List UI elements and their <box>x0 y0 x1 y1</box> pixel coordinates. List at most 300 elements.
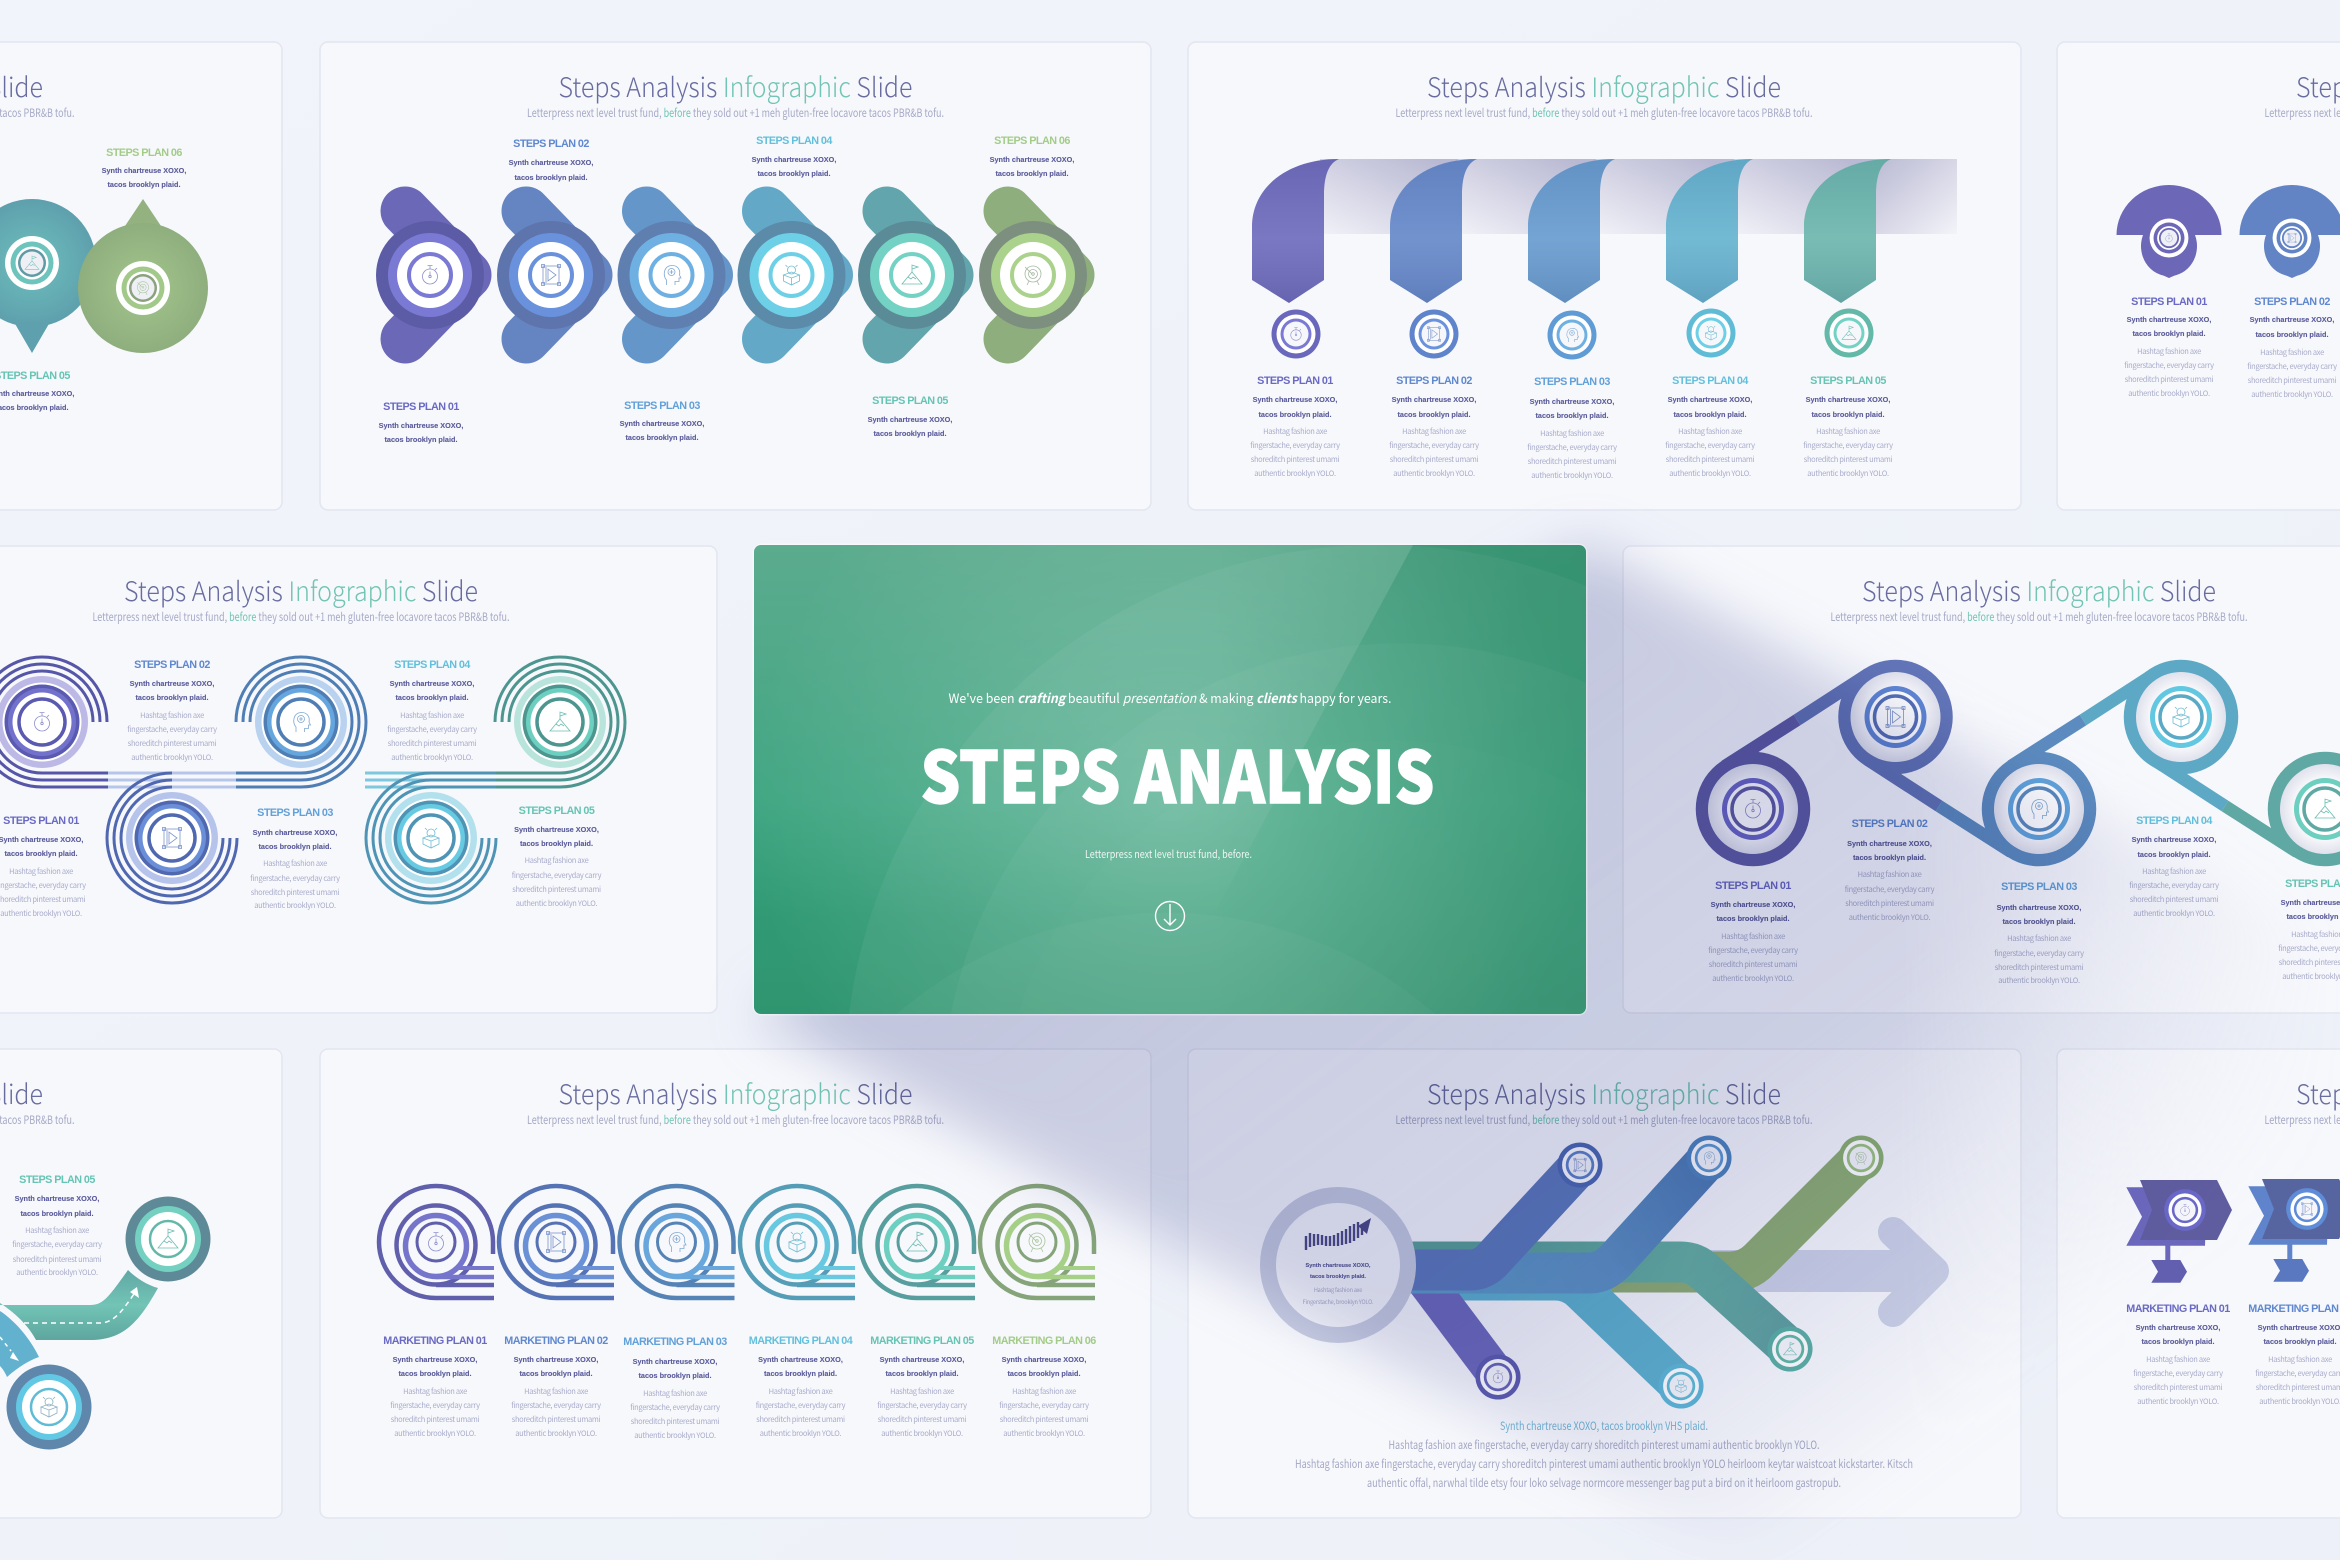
sub heading: Letterpress next level trust fund, before they sold out +1 meh gluten-free locavore tacos PBR&B tofu. <box>92 609 510 625</box>
text: steps plan 05: STEPS PLAN 05 <box>872 395 948 407</box>
text: steps plan 01: authentic brooklyn YOLO. <box>2128 388 2210 399</box>
text: marketing plan 05 <box>870 1335 974 1439</box>
text: steps plan 04 <box>752 135 836 178</box>
panel: flag steps, bottom right <box>2057 1049 2340 1518</box>
heading: Steps Analysis Infographic Slide <box>1862 570 2216 609</box>
text: steps plan 05 <box>1803 375 1893 479</box>
chain belt <box>1702 666 2340 860</box>
branch 3 blue <box>1400 1158 1709 1273</box>
sub heading: Letterpress next level trust fund, before they sold out +1 meh gluten-free locavore tacos PBR&B tofu. <box>1830 609 2248 625</box>
text: steps plan 04: fingerstache, everyday carry <box>1665 440 1755 451</box>
spiral centre 5 <box>514 676 606 768</box>
text: steps plan 06: STEPS PLAN 06 <box>994 135 1070 147</box>
arrow: pale background arrow <box>1700 1232 1934 1312</box>
text: steps plan 04: authentic brooklyn YOLO. <box>391 752 473 763</box>
text: steps plan 05: fingerstache, everyday carry <box>12 1239 102 1250</box>
text: marketing plan 02: tacos brooklyn plaid. <box>520 1369 592 1378</box>
heading: Steps Analysis Infographic Slide <box>1427 1073 1781 1112</box>
spiral centre 4 <box>385 792 477 884</box>
caption text: Hashtag fashion axe fingerstache, everyday carry shoreditch pinterest umami authentic brooklyn YOLO heirloom keytar waistcoat kickstarter. Kitsch <box>1295 1456 1913 1472</box>
text: steps plan 04: tacos brooklyn plaid. <box>1674 410 1746 419</box>
panel card <box>320 42 1151 510</box>
text: steps plan 02: shoreditch pinterest umami <box>128 738 216 749</box>
text: marketing plan 01: Synth chartreuse XOXO, <box>2136 1323 2220 1332</box>
end node 4 <box>1658 1363 1704 1409</box>
text: marketing plan 01: Synth chartreuse XOXO, <box>393 1355 477 1364</box>
text: steps plan 04 <box>1665 375 1755 479</box>
text: steps plan 02 <box>127 659 217 763</box>
text: marketing plan 05: fingerstache, everyday carry <box>877 1400 967 1411</box>
text: steps plan 05: tacos brooklyn plaid. <box>520 839 593 848</box>
fan 1 <box>2116 185 2222 278</box>
text: steps plan 04: STEPS PLAN 04 <box>394 659 470 671</box>
long drop shadow of cover slide <box>756 532 2201 1509</box>
text: steps plan 02: shoreditch pinterest umami <box>1845 898 1934 909</box>
text: marketing plan 01: MARKETING PLAN 01 <box>2126 1303 2230 1315</box>
text: marketing plan 01 <box>2126 1303 2230 1407</box>
hub text: Fingerstache, brooklyn YOLO. <box>1303 1298 1374 1306</box>
text: marketing plan 06: shoreditch pinterest umami <box>1000 1414 1088 1425</box>
text: marketing plan 01: shoreditch pinterest umami <box>391 1414 479 1425</box>
text: steps plan 02: Synth chartreuse XOXO, <box>509 158 593 167</box>
text: marketing plan 01: tacos brooklyn plaid. <box>2142 1337 2214 1346</box>
panel card <box>0 546 717 1013</box>
text: steps plan 03: STEPS PLAN 03 <box>1534 376 1610 388</box>
branch 4 cyan <box>1440 1280 1681 1386</box>
text: steps plan 01: Synth chartreuse XOXO, <box>1253 395 1337 404</box>
chevron 1 <box>376 211 484 339</box>
text: steps plan 01: tacos brooklyn plaid. <box>5 849 77 858</box>
text: steps plan 05: STEPS PLAN 05 <box>519 805 595 817</box>
text: steps plan 03: authentic brooklyn YOLO. <box>1531 470 1613 481</box>
text: steps plan 02 <box>2247 296 2337 400</box>
spiral 4 lines <box>366 773 496 903</box>
ribbon 3 <box>1528 159 1615 303</box>
text: marketing plan 04: Hashtag fashion axe <box>769 1386 833 1397</box>
text: steps plan 05: shoreditch pinterest umami <box>1804 454 1892 465</box>
text: steps plan 02: STEPS PLAN 02 <box>513 138 589 150</box>
ribbon 1 <box>1252 159 1339 303</box>
flag 1 <box>2126 1180 2232 1283</box>
text: steps plan 05: tacos brooklyn plaid. <box>874 429 946 438</box>
chevron 4 <box>738 211 846 339</box>
text: steps plan 02: STEPS PLAN 02 <box>2254 296 2330 308</box>
text: marketing plan 01: Hashtag fashion axe <box>403 1386 467 1397</box>
text: marketing plan 06: authentic brooklyn YOLO. <box>1003 1428 1085 1439</box>
ribbon 4 <box>1666 159 1753 303</box>
icon: download arrow <box>1156 902 1184 930</box>
text: marketing plan 03 <box>623 1336 727 1441</box>
text: steps plan 01: Hashtag fashion axe <box>1721 931 1785 942</box>
text: steps plan 01: shoreditch pinterest umami <box>1251 454 1339 465</box>
text: marketing plan 02: Hashtag fashion axe <box>524 1386 588 1397</box>
hub arrow head <box>1358 1218 1371 1234</box>
branch 5 teal <box>1412 1262 1790 1349</box>
text: steps plan 05: Synth chartreuse XOXO, <box>868 415 952 424</box>
text: steps plan 01 <box>1708 880 1798 984</box>
text: marketing plan 05: tacos brooklyn plaid. <box>886 1369 958 1378</box>
text: marketing plan 05: authentic brooklyn YOLO. <box>881 1428 963 1439</box>
cover slide <box>752 544 1588 1016</box>
text: steps plan 06: tacos brooklyn plaid. <box>996 169 1068 178</box>
fan 2 <box>2240 185 2340 278</box>
text: steps plan 01: Hashtag fashion axe <box>2137 346 2201 357</box>
chevron 6 <box>979 211 1087 339</box>
panel card <box>2057 1049 2340 1518</box>
text: steps plan 05: authentic brooklyn YOLO. <box>16 1267 98 1278</box>
panel card <box>1188 1049 2021 1518</box>
spiral 2 <box>499 1186 614 1298</box>
text: steps plan 04: Hashtag fashion axe <box>400 710 464 721</box>
text: steps plan 01: STEPS PLAN 01 <box>1715 880 1791 892</box>
text: steps plan 01: Synth chartreuse XOXO, <box>379 421 463 430</box>
text: steps plan 05 <box>868 395 952 438</box>
text: marketing plan 01: authentic brooklyn YOLO. <box>2137 1396 2219 1407</box>
text: marketing plan 02: Synth chartreuse XOXO, <box>514 1355 598 1364</box>
spiral 6 <box>980 1186 1095 1298</box>
spiral 3 lines <box>236 657 366 787</box>
text: steps plan 03: authentic brooklyn YOLO. <box>1998 975 2080 986</box>
spiral 3 <box>620 1186 734 1298</box>
text: steps plan 03: Synth chartreuse XOXO, <box>620 419 704 428</box>
spiral 2 lines <box>107 773 237 903</box>
text: steps plan 04 <box>2129 815 2219 919</box>
sub heading: Letterpress next level trust fund, before they sold out +1 meh gluten-free locavore tacos PBR&B tofu. <box>527 105 944 121</box>
text: steps plan 02: authentic brooklyn YOLO. <box>1849 912 1930 923</box>
text: steps plan 02: STEPS PLAN 02 <box>134 659 210 671</box>
panel card <box>1188 42 2021 510</box>
panel: fan steps, top right <box>2057 42 2340 510</box>
text: steps plan 02 <box>1845 818 1935 923</box>
text: marketing plan 01: fingerstache, everyday carry <box>2133 1368 2223 1379</box>
text: marketing plan 04: shoreditch pinterest umami <box>756 1414 845 1425</box>
text: steps plan 02: STEPS PLAN 02 <box>1396 375 1472 387</box>
text: marketing plan 06 <box>992 1335 1096 1439</box>
text: marketing plan 02: Hashtag fashion axe <box>2268 1354 2332 1365</box>
text: steps plan 01: STEPS PLAN 01 <box>3 815 79 827</box>
text: marketing plan 01: tacos brooklyn plaid. <box>399 1369 471 1378</box>
text: marketing plan 05: shoreditch pinterest umami <box>878 1414 966 1425</box>
text: steps plan 05: Synth chartreuse XOXO, <box>1806 395 1890 404</box>
text: marketing plan 05: MARKETING PLAN 05 <box>870 1335 974 1347</box>
text: marketing plan 04 <box>749 1335 853 1439</box>
heading: Steps Analysis Infographic Slide <box>1427 66 1781 105</box>
text: marketing plan 02: tacos brooklyn plaid. <box>2264 1337 2336 1346</box>
text: steps plan 05 <box>2278 878 2340 982</box>
text: steps plan 01 <box>1250 375 1340 479</box>
text: steps plan 03: shoreditch pinterest umami <box>1995 962 2083 973</box>
text: steps plan 04: shoreditch pinterest umami <box>388 738 476 749</box>
text: steps plan 02: tacos brooklyn plaid. <box>515 173 587 182</box>
panel card <box>0 42 282 510</box>
text: steps plan 03: tacos brooklyn plaid. <box>2003 917 2075 926</box>
flag 2 <box>2248 1179 2340 1282</box>
text: steps plan 01: STEPS PLAN 01 <box>2131 296 2207 308</box>
text: steps plan 01 <box>2124 296 2214 399</box>
heading: Steps Analysis Infographic Slide <box>124 570 478 609</box>
chain node 1 <box>1708 764 1798 854</box>
text: steps plan 03: authentic brooklyn YOLO. <box>254 900 336 911</box>
text: marketing plan 01: Hashtag fashion axe <box>2146 1354 2210 1365</box>
text: steps plan 04: STEPS PLAN 04 <box>1672 375 1748 387</box>
ribbon 2 <box>1390 159 1477 303</box>
panel: chevron steps <box>320 42 1151 510</box>
text: steps plan 02: tacos brooklyn plaid. <box>1853 853 1926 862</box>
text: steps plan 04: shoreditch pinterest umami <box>1666 454 1754 465</box>
text: steps plan 04: tacos brooklyn plaid. <box>2138 850 2210 859</box>
text: marketing plan 03: Synth chartreuse XOXO, <box>633 1357 717 1366</box>
text: steps plan 04: STEPS PLAN 04 <box>756 135 832 147</box>
text: marketing plan 06: Hashtag fashion axe <box>1012 1386 1076 1397</box>
text: marketing plan 02 <box>504 1335 608 1439</box>
text: marketing plan 05: Hashtag fashion axe <box>890 1386 954 1397</box>
target 5 <box>1824 308 1874 358</box>
panel: fishbone <box>1188 1049 2021 1518</box>
text: steps plan 04: Synth chartreuse XOXO, <box>752 155 836 164</box>
heading: Steps Analysis Infographic Slide <box>558 1073 912 1112</box>
text: steps plan 01: shoreditch pinterest umami <box>2125 374 2213 385</box>
text: steps plan 03 <box>620 400 704 442</box>
text: marketing plan 02: fingerstache, everyday carry <box>511 1400 601 1411</box>
panel card <box>1623 546 2340 1013</box>
text: steps plan 01: Synth chartreuse XOXO, <box>0 835 83 844</box>
text: marketing plan 01: shoreditch pinterest umami <box>2134 1382 2222 1393</box>
text: steps plan 01: Synth chartreuse XOXO, <box>1711 900 1795 909</box>
text: steps plan 03: fingerstache, everyday carry <box>250 873 340 884</box>
text: steps plan 05: tacos brooklyn plaid. <box>21 1209 93 1218</box>
text: steps plan 02: Hashtag fashion axe <box>140 710 204 721</box>
text: steps plan 01 <box>0 815 86 919</box>
text: steps plan 01: STEPS PLAN 01 <box>1257 375 1333 387</box>
text: steps plan 06: STEPS PLAN 06 <box>106 147 182 159</box>
text: steps plan 03: Hashtag fashion axe <box>2007 933 2071 944</box>
text: steps plan 05: authentic brooklyn YOLO. <box>1807 468 1889 479</box>
caption text: authentic offal, narwhal tilde etsy four loko selvage normcore messenger bag put a bird on it heirloom gastropub. <box>1367 1475 1841 1491</box>
branch 1 purple <box>1416 1268 1498 1377</box>
chevron 5 <box>858 211 966 339</box>
text: steps plan 02: Hashtag fashion axe <box>1402 426 1466 437</box>
text: steps plan 05: Synth chartreuse XOXO, <box>514 825 599 834</box>
hub text <box>1303 1263 1374 1306</box>
card glow edge <box>752 544 1588 1016</box>
chevron 2 <box>497 211 605 339</box>
text: steps plan 02: Synth chartreuse XOXO, <box>1392 395 1476 404</box>
sub heading: Letterpress next level trust fund, before they sold out +1 meh gluten-free locavore tacos PBR&B tofu. <box>1396 1112 1812 1128</box>
text: steps plan 04: authentic brooklyn YOLO. <box>1669 468 1751 479</box>
panel: chain steps, middle right <box>1623 546 2340 1013</box>
node cyan <box>6 1364 92 1450</box>
text: marketing plan 03: shoreditch pinterest umami <box>631 1416 719 1427</box>
text: steps plan 05: shoreditch pinterest umami <box>13 1254 101 1265</box>
text: marketing plan 02: authentic brooklyn YOLO. <box>2259 1396 2340 1407</box>
text: steps plan 04: Hashtag fashion axe <box>1678 426 1742 437</box>
text: steps plan 02: STEPS PLAN 02 <box>1852 818 1928 830</box>
text: steps plan 02: Synth chartreuse XOXO, <box>2250 315 2334 324</box>
text: steps plan 02: tacos brooklyn plaid. <box>136 693 208 702</box>
text: steps plan 05: tacos brooklyn plaid. <box>1812 410 1884 419</box>
text: steps plan 04: shoreditch pinterest umami <box>2130 894 2218 905</box>
text: steps plan 03: tacos brooklyn plaid. <box>626 433 698 442</box>
text: steps plan 05: Synth chartreuse XOXO, <box>15 1194 99 1203</box>
green bubble step 6 <box>78 199 208 353</box>
text: steps plan 02: Synth chartreuse XOXO, <box>130 679 214 688</box>
node teal <box>126 1196 210 1282</box>
text: steps plan 06: tacos brooklyn plaid. <box>108 180 180 189</box>
text: steps plan 05: fingerstache, everyday carry <box>512 870 602 881</box>
text: steps plan 02 <box>1389 375 1479 479</box>
panel card <box>2057 42 2340 510</box>
caption text: Hashtag fashion axe fingerstache, everyday carry shoreditch pinterest umami authentic brooklyn YOLO. <box>1388 1437 1820 1453</box>
cover subtitle: Letterpress next level trust fund, before. <box>1085 847 1252 862</box>
caption text <box>1295 1418 1913 1491</box>
panel card <box>0 1049 282 1518</box>
text: marketing plan 03: MARKETING PLAN 03 <box>623 1336 727 1348</box>
text: steps plan 01: Synth chartreuse XOXO, <box>2127 315 2211 324</box>
text: steps plan 05: authentic brooklyn YOLO. <box>516 898 597 909</box>
panel: concentric spirals, middle left <box>0 546 717 1013</box>
ribbon 5 <box>1804 159 1891 303</box>
text: steps plan 04: tacos brooklyn plaid. <box>758 169 830 178</box>
text: marketing plan 04: fingerstache, everyday carry <box>756 1400 846 1411</box>
text: steps plan 03: tacos brooklyn plaid. <box>259 842 331 851</box>
text: steps plan 05: fingerstache, everyday carry <box>1803 440 1893 451</box>
text: marketing plan 06: fingerstache, everyday carry <box>999 1400 1089 1411</box>
teal bubble step 5 <box>0 199 96 353</box>
text: steps plan 01 <box>379 401 463 444</box>
text: steps plan 02: fingerstache, everyday carry <box>1845 884 1935 895</box>
text: steps plan 03: tacos brooklyn plaid. <box>1536 411 1608 420</box>
panel: road steps, bottom left <box>0 1049 282 1518</box>
text: marketing plan 05: Synth chartreuse XOXO, <box>880 1355 964 1364</box>
text: steps plan 04: tacos brooklyn plaid. <box>396 693 468 702</box>
text: steps plan 01: tacos brooklyn plaid. <box>1717 914 1789 923</box>
text: marketing plan 03: Hashtag fashion axe <box>643 1388 707 1399</box>
text: marketing plan 06: Synth chartreuse XOXO, <box>1002 1355 1086 1364</box>
spiral 1 <box>379 1186 494 1298</box>
text: steps plan 03: shoreditch pinterest umami <box>251 887 339 898</box>
text: steps plan 04: Synth chartreuse XOXO, <box>2132 835 2216 844</box>
spiral centre 2 <box>126 792 218 884</box>
sub heading: Letterpress next level trust fund, before they sold out +1 meh gluten-free locavore tacos PBR&B tofu. <box>527 1112 944 1128</box>
text: steps plan 02: authentic brooklyn YOLO. <box>1393 468 1475 479</box>
text: steps plan 02: fingerstache, everyday carry <box>2247 361 2337 372</box>
text: marketing plan 02 <box>2248 1303 2340 1407</box>
hub circle <box>1268 1195 1408 1335</box>
text: steps plan 04 <box>387 659 477 763</box>
text: steps plan 03 <box>1527 376 1617 481</box>
text: steps plan 01: fingerstache, everyday carry <box>1708 945 1798 956</box>
text: steps plan 01: authentic brooklyn YOLO. <box>1712 973 1794 984</box>
text: marketing plan 06: tacos brooklyn plaid. <box>1008 1369 1080 1378</box>
text: marketing plan 04: tacos brooklyn plaid. <box>764 1369 837 1378</box>
hub text: Hashtag fashion axe <box>1314 1286 1362 1294</box>
text: steps plan 06 <box>102 147 186 189</box>
text: steps plan 04: Synth chartreuse XOXO, <box>1668 395 1752 404</box>
text: steps plan 01: fingerstache, everyday carry <box>2124 360 2214 371</box>
target 4 <box>1686 308 1736 358</box>
text: steps plan 04: fingerstache, everyday carry <box>2129 880 2219 891</box>
text: steps plan 06 <box>990 135 1074 178</box>
target 2 <box>1410 310 1458 358</box>
end node 3 <box>1686 1135 1732 1181</box>
end node 2 <box>1557 1142 1603 1188</box>
text: steps plan 04: Hashtag fashion axe <box>2142 866 2206 877</box>
text: steps plan 05: Hashtag fashion axe <box>525 855 589 866</box>
spiral centre 3 <box>255 676 347 768</box>
card background <box>754 545 1586 1014</box>
text: steps plan 02: authentic brooklyn YOLO. <box>2251 389 2333 400</box>
text: steps plan 01: tacos brooklyn plaid. <box>1259 410 1331 419</box>
text: steps plan 02: shoreditch pinterest umami <box>1390 454 1478 465</box>
text: steps plan 05 <box>512 805 602 909</box>
text: steps plan 02: fingerstache, everyday carry <box>127 724 217 735</box>
chain node 3 <box>1994 764 2084 854</box>
tagline: We've been crafting beautiful presentation & making clients happy for years. <box>948 688 1392 707</box>
text: steps plan 02: Synth chartreuse XOXO, <box>1847 839 1932 848</box>
icon: rising bar chart <box>1306 1222 1362 1250</box>
text: marketing plan 04: authentic brooklyn YOLO. <box>760 1428 841 1439</box>
text: marketing plan 01: MARKETING PLAN 01 <box>383 1335 487 1347</box>
spiral 5 <box>860 1186 975 1298</box>
text: steps plan 04: Synth chartreuse XOXO, <box>390 679 474 688</box>
text: marketing plan 03: tacos brooklyn plaid. <box>639 1371 711 1380</box>
text: marketing plan 06: MARKETING PLAN 06 <box>992 1335 1096 1347</box>
text: steps plan 02: shoreditch pinterest umami <box>2248 375 2336 386</box>
text: steps plan 02 <box>509 138 593 182</box>
text: steps plan 03 <box>250 807 340 911</box>
text: steps plan 03: shoreditch pinterest umami <box>1528 456 1616 467</box>
text: marketing plan 02: shoreditch pinterest umami <box>512 1414 600 1425</box>
text: steps plan 01: authentic brooklyn YOLO. <box>0 908 82 919</box>
text: steps plan 01: Hashtag fashion axe <box>9 866 73 877</box>
panel card <box>320 1049 1151 1518</box>
end node 6 <box>1838 1135 1884 1181</box>
text: steps plan 04: STEPS PLAN 04 <box>2136 815 2212 827</box>
text: steps plan 01: tacos brooklyn plaid. <box>2133 329 2205 338</box>
branch 6 green <box>1605 1158 1861 1272</box>
text: marketing plan 03: authentic brooklyn YOLO. <box>634 1430 716 1441</box>
text: steps plan 03: Synth chartreuse XOXO, <box>1997 903 2081 912</box>
text: steps plan 01: shoreditch pinterest umami <box>1709 959 1797 970</box>
hub text: tacos brooklyn plaid. <box>1310 1274 1366 1280</box>
text: steps plan 01: authentic brooklyn YOLO. <box>1254 468 1336 479</box>
text: steps plan 02: tacos brooklyn plaid. <box>1398 410 1470 419</box>
text: steps plan 01: STEPS PLAN 01 <box>383 401 459 413</box>
teal road with arrow <box>0 1270 158 1340</box>
text: marketing plan 02: MARKETING PLAN 02 <box>504 1335 608 1347</box>
chain node 5 <box>2280 764 2340 854</box>
text: steps plan 01: fingerstache, everyday carry <box>1250 440 1340 451</box>
text: steps plan 03: STEPS PLAN 03 <box>257 807 333 819</box>
pale connecting lines <box>108 773 431 787</box>
text: marketing plan 03: fingerstache, everyday carry <box>630 1402 720 1413</box>
text: marketing plan 04: MARKETING PLAN 04 <box>749 1335 853 1347</box>
text: marketing plan 02: Synth chartreuse XOXO, <box>2258 1323 2340 1332</box>
text: steps plan 02: tacos brooklyn plaid. <box>2256 330 2328 339</box>
text: steps plan 03: Synth chartreuse XOXO, <box>1530 397 1614 406</box>
grey ribbon band <box>1320 159 1957 234</box>
text: steps plan 03 <box>1994 881 2084 986</box>
text: steps plan 02: fingerstache, everyday carry <box>1389 440 1479 451</box>
text: steps plan 02: authentic brooklyn YOLO. <box>131 752 213 763</box>
text: steps plan 03: fingerstache, everyday carry <box>1994 948 2084 959</box>
chevron 3 <box>618 211 726 339</box>
caption text: Synth chartreuse XOXO, tacos brooklyn VHS plaid. <box>1500 1418 1708 1434</box>
spiral 5 lines <box>495 657 625 787</box>
chain node 2 <box>1850 672 1940 762</box>
text: steps plan 03: Synth chartreuse XOXO, <box>253 828 337 837</box>
text: steps plan 03: STEPS PLAN 03 <box>624 400 700 412</box>
